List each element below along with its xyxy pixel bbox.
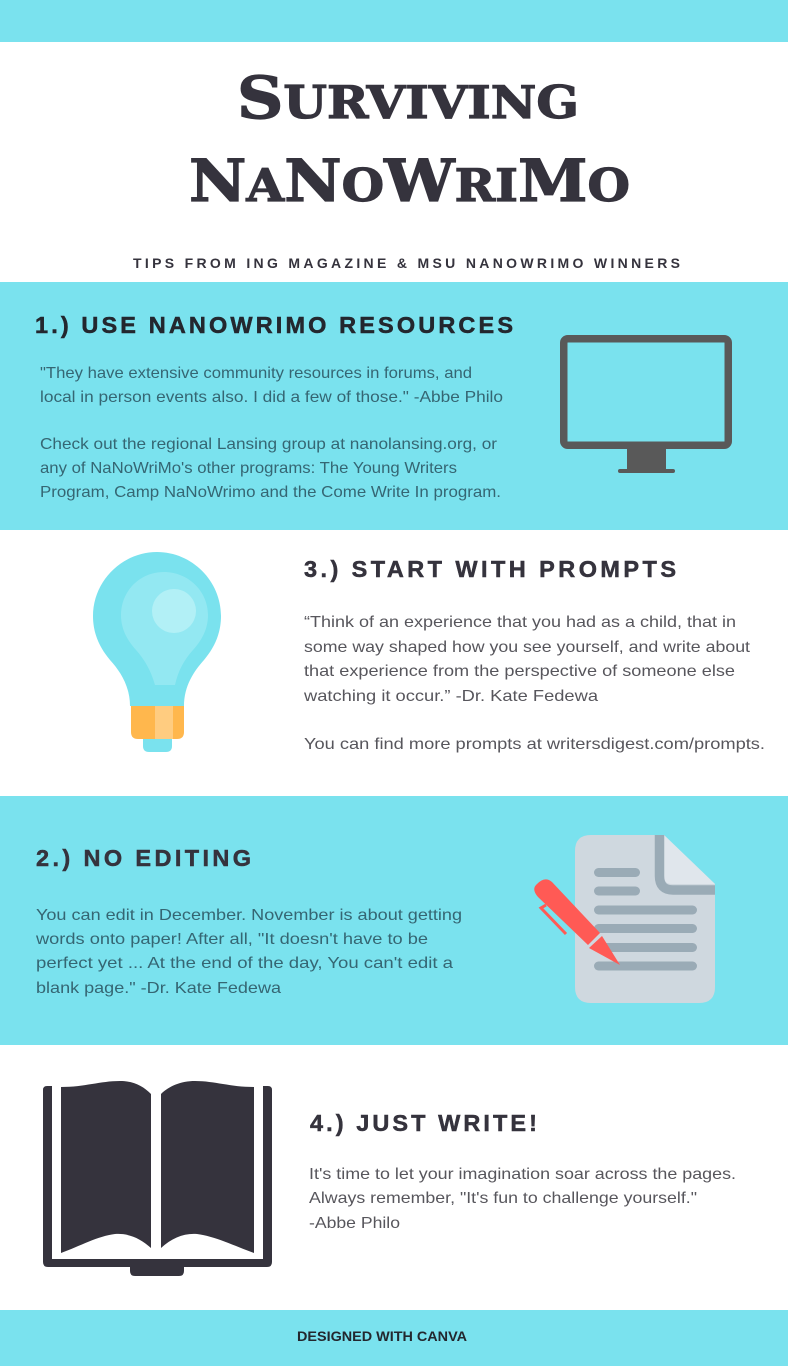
heading: tip 2: 2.) NO EDITING — [36, 845, 251, 871]
footer band — [0, 1310, 788, 1366]
title: SURVIVING — [237, 64, 579, 132]
text block: tip 1: "They have extensive community resources in forums, and — [40, 365, 472, 382]
text block: tip 3: that experience from the perspective of someone else — [304, 663, 735, 680]
text block: tip 3 — [303, 614, 765, 753]
icon: open book — [43, 1081, 272, 1276]
footer credit: DESIGNED WITH CANVA — [297, 1328, 467, 1344]
text block: tip 3: some way shaped how you see yourself, and write about — [304, 639, 751, 656]
icon: light bulb — [93, 552, 221, 752]
text block: tip 2 — [35, 907, 462, 997]
text block: tip 4 — [309, 1166, 736, 1232]
text block: tip 1: Program, Camp NaNoWrimo and the Come Write In program. — [40, 484, 501, 501]
text block: tip 2: words onto paper! After all, "It doesn't have to be — [35, 931, 428, 948]
panel: tip 3 start with prompts — [93, 552, 765, 753]
title: NANOWRIMO — [189, 147, 630, 215]
text block: tip 4: -Abbe Philo — [309, 1215, 400, 1232]
text block: tip 4: It's time to let your imagination soar across the pages. — [309, 1166, 736, 1183]
text block: tip 3: “Think of an experience that you had as a child, that in — [304, 614, 736, 631]
panel: tip 2 no editing — [0, 796, 788, 1045]
text block: tip 1 — [40, 365, 503, 501]
text block: tip 1: local in person events also. I did a few of those." -Abbe Philo — [40, 389, 503, 406]
icon: document with pen — [534, 835, 715, 1003]
top band — [0, 0, 788, 42]
text block: tip 3: watching it occur.” -Dr. Kate Fedewa — [303, 688, 598, 705]
heading: tip 3: 3.) START WITH PROMPTS — [304, 556, 676, 582]
text block: tip 2: perfect yet ... At the end of the day, You can't edit a — [36, 955, 453, 972]
text block: tip 2: blank page." -Dr. Kate Fedewa — [36, 980, 281, 997]
text block: tip 3: You can find more prompts at writersdigest.com/prompts. — [304, 736, 765, 753]
subtitle: TIPS FROM ING MAGAZINE & MSU NANOWRIMO WINNERS — [133, 255, 680, 271]
heading: tip 1: 1.) USE NANOWRIMO RESOURCES — [35, 312, 513, 338]
title — [189, 64, 630, 215]
text block: tip 2: You can edit in December. November is about getting — [36, 907, 462, 924]
text block: tip 1: Check out the regional Lansing group at nanolansing.org, or — [40, 436, 498, 453]
panel: tip 1 use NaNoWriMo resources — [0, 282, 788, 530]
text block: tip 4: Always remember, "It's fun to challenge yourself." — [309, 1190, 697, 1207]
heading: tip 4: 4.) JUST WRITE! — [310, 1110, 537, 1136]
panel: tip 4 just write — [43, 1081, 736, 1276]
text block: tip 1: any of NaNoWriMo's other programs: The Young Writers — [40, 460, 457, 477]
icon: computer monitor — [564, 339, 728, 473]
